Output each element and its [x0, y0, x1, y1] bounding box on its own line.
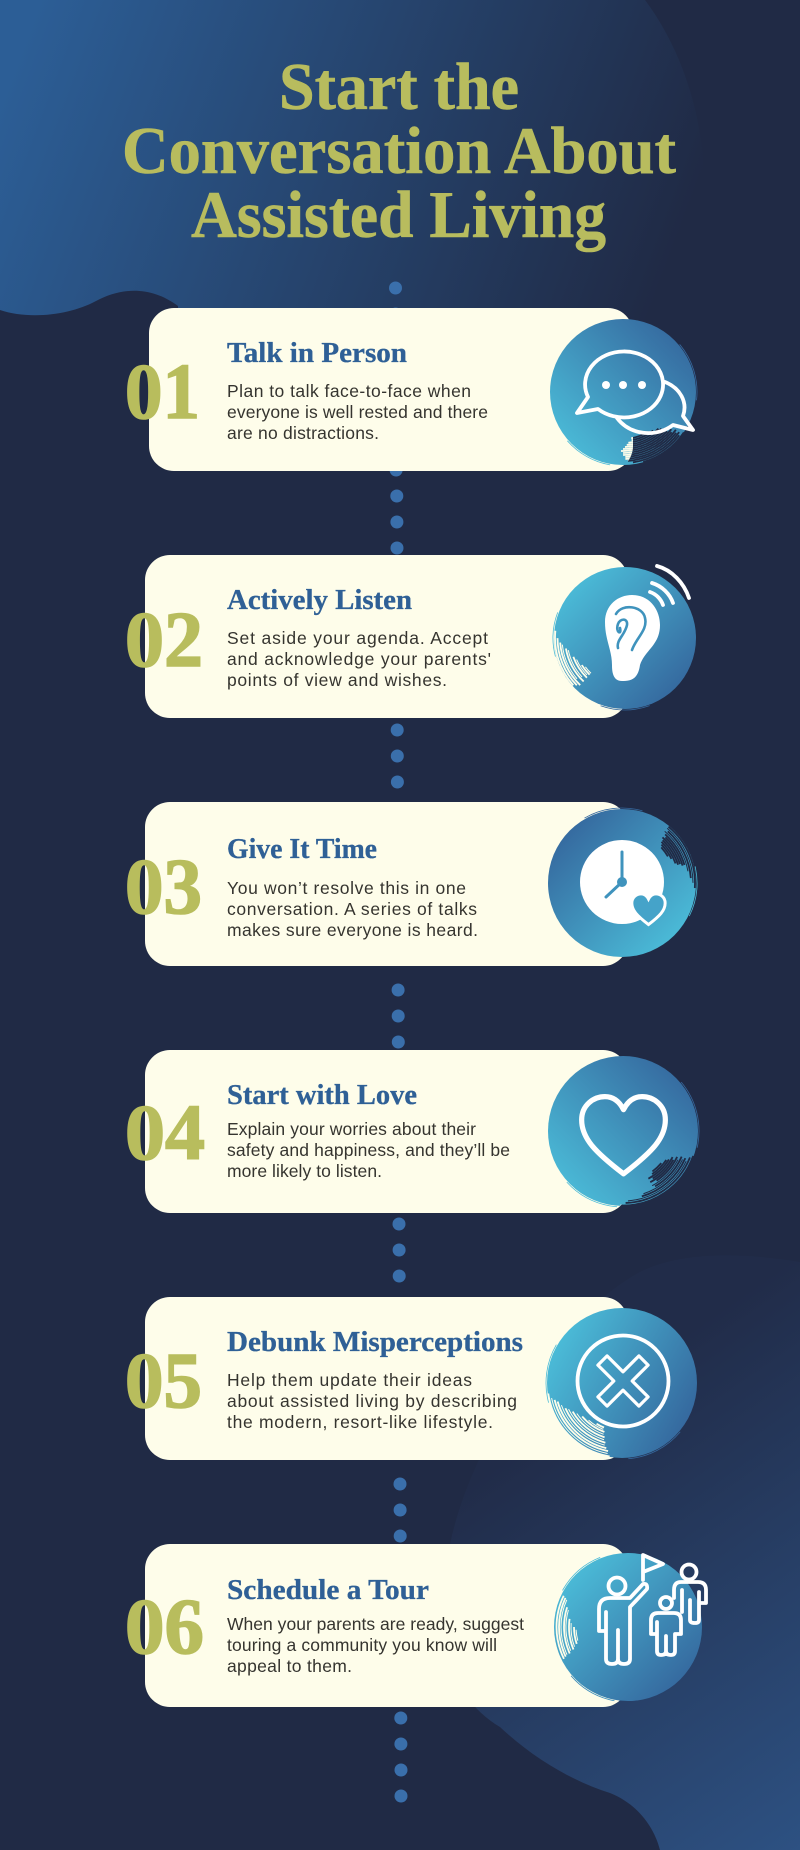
card background — [145, 555, 628, 718]
body text: points of view and wishes. — [227, 670, 447, 690]
card background — [145, 1297, 628, 1460]
heading: Talk in Person — [227, 338, 407, 369]
title — [122, 50, 677, 252]
brush circle — [550, 319, 698, 466]
body text — [227, 381, 488, 443]
body text — [227, 878, 478, 940]
body text — [227, 1119, 510, 1181]
body text: are no distractions. — [227, 423, 379, 443]
background blob: bottom right — [443, 1255, 800, 1850]
panel: step 1 — [127, 308, 698, 471]
body text: When your parents are ready, suggest — [227, 1614, 524, 1634]
body text: more likely to listen. — [227, 1161, 382, 1181]
brush circle — [552, 567, 696, 710]
body text — [227, 1370, 517, 1432]
icon: X in circle — [578, 1336, 668, 1426]
body text: safety and happiness, and they’ll be — [227, 1140, 510, 1160]
body text: touring a community you know will — [227, 1635, 497, 1655]
brush circle — [548, 808, 698, 957]
body text: Explain your worries about their — [227, 1119, 476, 1139]
panel: step 6 — [127, 1544, 708, 1707]
panel: step 3 — [127, 802, 698, 966]
heading: Schedule a Tour — [227, 1575, 429, 1606]
body text: the modern, resort-like lifestyle. — [227, 1412, 493, 1432]
icon: speech bubbles — [577, 351, 693, 433]
title: Conversation About — [122, 114, 677, 188]
brush circle — [554, 1553, 702, 1702]
title: Start the — [279, 50, 519, 124]
body text: appeal to them. — [227, 1656, 352, 1676]
icon: ear with sound waves — [605, 566, 689, 681]
body text: about assisted living by describing — [227, 1391, 517, 1411]
card background — [149, 308, 633, 471]
body text: and acknowledge your parents' — [227, 649, 491, 669]
dotted timeline — [389, 282, 408, 1802]
title: Assisted Living — [191, 178, 606, 252]
body text: conversation. A series of talks — [227, 899, 477, 919]
body text: makes sure everyone is heard. — [227, 920, 478, 940]
panel: step 4 — [127, 1050, 700, 1213]
card background — [145, 802, 628, 966]
heading: Give It Time — [227, 834, 377, 865]
brush circle — [546, 1308, 697, 1460]
heading: Debunk Misperceptions — [227, 1327, 523, 1358]
panel: step 5 — [127, 1297, 697, 1460]
icon: guide with flag and two people — [599, 1555, 706, 1664]
number: 02 — [125, 597, 203, 684]
body text: You won’t resolve this in one — [227, 878, 466, 898]
card background — [145, 1544, 628, 1707]
number: 05 — [125, 1338, 202, 1425]
number: 04 — [125, 1090, 205, 1177]
number: 06 — [125, 1584, 204, 1671]
body text: Plan to talk face-to-face when — [227, 381, 471, 401]
number: 01 — [125, 349, 200, 436]
icon: clock with heart — [580, 840, 665, 925]
background blob: top left — [0, 0, 704, 335]
body text — [227, 1614, 524, 1676]
body text: Help them update their ideas — [227, 1370, 472, 1390]
icon: heart outline — [582, 1097, 665, 1174]
heading: Start with Love — [227, 1080, 417, 1111]
body text: Set aside your agenda. Accept — [227, 628, 488, 648]
number: 03 — [125, 844, 202, 931]
body text: everyone is well rested and there — [227, 402, 488, 422]
panel: step 2 — [127, 555, 696, 718]
brush circle — [548, 1056, 700, 1208]
heading: Actively Listen — [227, 585, 412, 616]
card background — [145, 1050, 628, 1213]
body text — [227, 628, 491, 690]
